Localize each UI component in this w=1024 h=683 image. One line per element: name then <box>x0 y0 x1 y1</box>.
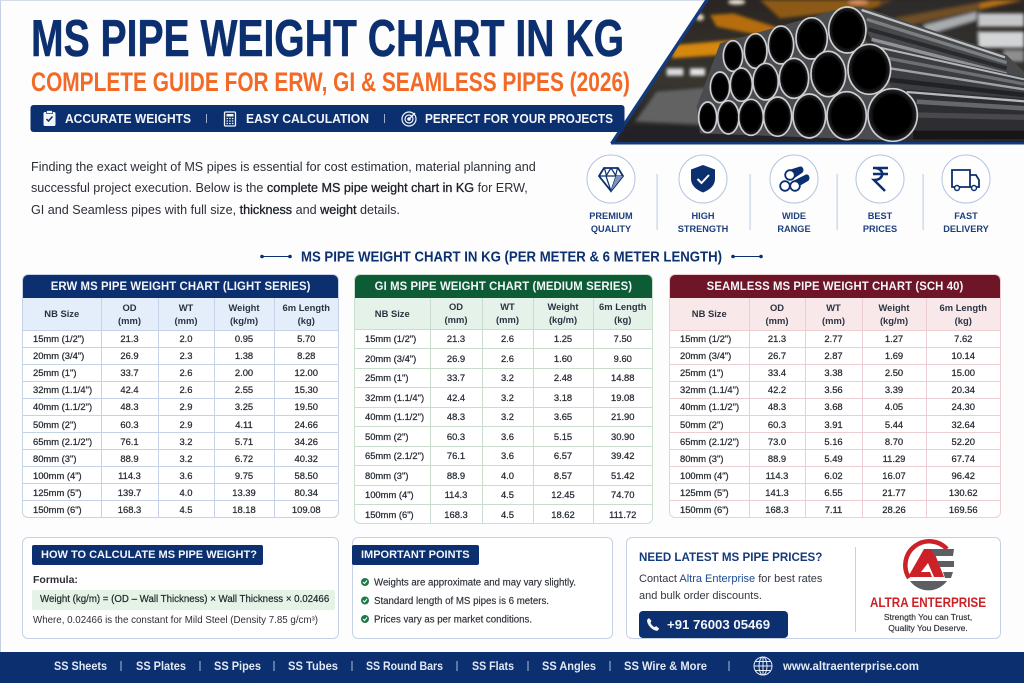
feature labels: WIDE <box>782 211 806 221</box>
table: ERW: Weight <box>228 302 260 313</box>
table: Seamless: 1.27 <box>885 333 903 344</box>
table: Seamless: 21.3 <box>768 333 786 344</box>
table: GI: 21.3 <box>447 333 465 344</box>
table: Seamless: 73.0 <box>768 436 786 447</box>
table: GI: 15mm (1/2") <box>365 333 416 344</box>
table: ERW: 58.50 <box>295 470 318 481</box>
table: Seamless: 1.69 <box>885 350 903 361</box>
table: GI: 12.45 <box>551 489 575 500</box>
table: ERW: 13.39 <box>232 487 256 498</box>
table: GI: 25mm (1") <box>365 372 408 383</box>
table: GI: 114.3 <box>445 489 467 500</box>
panel: ERW table <box>22 274 339 518</box>
table: GI: 51.42 <box>611 470 634 481</box>
table: ERW: WT <box>179 302 193 313</box>
icon: pipes <box>770 155 818 203</box>
table: ERW: OD <box>122 302 137 313</box>
table: Seamless <box>670 298 1000 517</box>
table: Seamless: 32.64 <box>952 419 975 430</box>
heading: ERW: ERW MS PIPE WEIGHT CHART (LIGHT SERIES) <box>51 279 310 293</box>
table: ERW: 25mm (1") <box>33 367 76 378</box>
table: ERW: 2.3 <box>179 350 193 361</box>
table: Seamless: 3.68 <box>824 401 843 412</box>
table: ERW: 4.5 <box>179 504 193 515</box>
table: ERW: 42.4 <box>120 384 139 395</box>
heading: GI <box>355 275 652 298</box>
table: ERW: 15mm (1/2") <box>33 333 84 344</box>
table: GI: 40mm (1.1/2") <box>365 411 424 422</box>
table: Seamless: 169.56 <box>949 504 978 515</box>
table: ERW: 5.71 <box>235 436 253 447</box>
table: Seamless: (kg) <box>955 315 972 326</box>
table: GI: 5.15 <box>554 431 572 442</box>
formula label: Formula: <box>33 574 78 586</box>
table: Seamless: 33.4 <box>768 367 786 378</box>
footer bar: SS Tubes <box>288 661 338 673</box>
panel: contact and logo <box>626 537 1001 639</box>
table: GI: 4.5 <box>501 509 514 520</box>
table: ERW: 50mm (2") <box>33 419 76 430</box>
table: GI: Weight <box>547 301 579 312</box>
heading: how to calculate: HOW TO CALCULATE MS PIPE WEIGHT? <box>41 549 257 561</box>
table: Seamless: 88.9 <box>768 453 786 464</box>
brand tagline: Strength You can Trust, <box>884 612 972 622</box>
heading: Seamless <box>670 275 1000 298</box>
table: ERW: 15.30 <box>295 384 318 395</box>
table: GI: (mm) <box>445 314 467 325</box>
table: ERW: 125mm (5") <box>33 487 82 498</box>
table: ERW: (kg) <box>298 315 315 326</box>
table: Seamless: 15.00 <box>952 367 975 378</box>
table: GI: 48.3 <box>447 411 465 422</box>
table: GI: 6.57 <box>554 450 572 461</box>
table: GI: 42.4 <box>447 392 465 403</box>
feature labels: PRICES <box>863 224 897 234</box>
brand logo <box>903 539 954 590</box>
feature labels: HIGH <box>692 211 715 221</box>
table: GI: 65mm (2.1/2") <box>365 450 424 461</box>
table: Seamless: 8.70 <box>885 436 903 447</box>
icon: diamond <box>587 155 635 203</box>
table: ERW: 3.6 <box>179 470 193 481</box>
pipe bodies <box>853 7 1024 142</box>
tagline bar <box>30 105 624 132</box>
panel: GI table <box>354 274 653 524</box>
heading: ERW <box>23 275 338 298</box>
table: GI: 150mm (6") <box>365 509 414 520</box>
footer bar: SS Angles <box>542 661 596 673</box>
table: GI: WT <box>500 301 515 312</box>
table: GI: 14.88 <box>611 372 634 383</box>
table: Seamless: 7.11 <box>825 504 842 515</box>
table: ERW: 40.32 <box>295 453 318 464</box>
tagline bar: PERFECT FOR YOUR PROJECTS <box>425 111 613 126</box>
table: Seamless: 42.2 <box>768 384 786 395</box>
table: ERW: 8.28 <box>297 350 315 361</box>
table: ERW: 88.9 <box>120 453 139 464</box>
table: GI: 60.3 <box>447 431 465 442</box>
table: ERW: 2.55 <box>235 384 253 395</box>
table: ERW: 114.3 <box>118 470 141 481</box>
table: GI: 3.65 <box>554 411 572 422</box>
heading: Seamless: SEAMLESS MS PIPE WEIGHT CHART (SCH 40) <box>707 279 963 293</box>
pipe stack backing <box>696 10 891 140</box>
table: Seamless: 80mm (3") <box>680 453 723 464</box>
icon: globe <box>754 657 772 675</box>
table: Seamless: 2.50 <box>885 367 903 378</box>
feature labels: RANGE <box>777 224 811 234</box>
table: GI: 50mm (2") <box>365 431 408 442</box>
brand tagline <box>884 612 972 633</box>
footer bar: SS Flats <box>472 661 514 673</box>
table: GI: 7.50 <box>614 333 632 344</box>
footer bar <box>0 652 1024 683</box>
bullet list <box>361 578 576 626</box>
table: Seamless: Weight <box>878 302 910 313</box>
formula box: Weight (kg/m) = (OD – Wall Thickness) × Wall Thickness × 0.02466 <box>40 594 329 605</box>
table: GI: 2.6 <box>501 353 514 364</box>
table: ERW: 6.72 <box>235 453 253 464</box>
table: ERW: 80mm (3") <box>33 453 76 464</box>
contact text <box>639 573 822 602</box>
table: Seamless: 25mm (1") <box>680 367 723 378</box>
table: Seamless: 67.74 <box>952 453 975 464</box>
table: GI: (mm) <box>496 314 519 325</box>
table: ERW: 2.00 <box>235 367 253 378</box>
table: GI: 3.6 <box>501 431 514 442</box>
table: GI: 30.90 <box>611 431 634 442</box>
table: Seamless: 130.62 <box>949 487 978 498</box>
table: Seamless: 48.3 <box>768 401 786 412</box>
heading: how to calculate <box>32 545 263 565</box>
footer bar: SS Wire & More <box>624 661 707 673</box>
intro paragraph: GI and Seamless pipes with full size, thickness and weight details. <box>31 203 400 217</box>
table: Seamless: 5.44 <box>885 419 903 430</box>
table: Seamless: OD <box>770 302 784 313</box>
table: ERW <box>23 298 338 517</box>
table: GI: 76.1 <box>447 450 465 461</box>
divider <box>855 547 856 632</box>
table: ERW: 33.7 <box>120 367 139 378</box>
table: ERW: 21.3 <box>120 333 139 344</box>
contact text: Contact Altra Enterprise for best rates <box>639 573 822 585</box>
table: ERW: NB Size <box>44 308 79 319</box>
table: Seamless: 6.55 <box>824 487 843 498</box>
table: GI: 3.2 <box>501 392 514 403</box>
table: GI: 3.2 <box>501 372 514 383</box>
table: ERW: 19.50 <box>295 401 318 412</box>
table: Seamless: 150mm (6") <box>680 504 729 515</box>
table: Seamless: 21.77 <box>882 487 906 498</box>
table: GI: 3.6 <box>501 450 514 461</box>
table: Seamless: 32mm (1.1/4") <box>680 384 739 395</box>
table: ERW: 150mm (6") <box>33 504 82 515</box>
footer bar: SS Pipes <box>214 661 261 673</box>
table: Seamless: WT <box>826 302 841 313</box>
table: GI: 100mm (4") <box>365 489 414 500</box>
table: Seamless: 15mm (1/2") <box>680 333 731 344</box>
table: Seamless: 2.87 <box>824 350 843 361</box>
table: Seamless: 60.3 <box>768 419 786 430</box>
table: Seamless: (mm) <box>822 315 845 326</box>
table: ERW: 18.18 <box>232 504 256 515</box>
table: Seamless: 141.3 <box>765 487 789 498</box>
bullet list: Weights are approximate and may vary slightly. <box>374 578 576 588</box>
table: ERW: (mm) <box>118 315 141 326</box>
table: Seamless: 3.56 <box>824 384 843 395</box>
table: Seamless: 3.38 <box>824 367 843 378</box>
table: ERW: 9.75 <box>235 470 253 481</box>
table: GI: 3.2 <box>501 411 514 422</box>
table: ERW: 65mm (2.1/2") <box>33 436 92 447</box>
contact text: and bulk order discounts. <box>639 590 762 602</box>
table: GI: 1.25 <box>554 333 572 344</box>
table: Seamless: 96.42 <box>952 470 975 481</box>
icon: truck <box>942 155 990 203</box>
heading: GI: GI MS PIPE WEIGHT CHART (MEDIUM SERIES) <box>375 279 632 293</box>
footer bar: SS Plates <box>136 661 186 673</box>
table: Seamless: 5.49 <box>824 453 843 464</box>
table: ERW: 5.70 <box>297 333 315 344</box>
table: ERW: 40mm (1.1/2") <box>33 401 92 412</box>
contact heading: NEED LATEST MS PIPE PRICES? <box>639 551 822 564</box>
table: GI: 4.0 <box>501 470 514 481</box>
bullet list: Standard length of MS pipes is 6 meters. <box>374 596 549 607</box>
table: ERW: 3.2 <box>179 453 193 464</box>
feature labels: PREMIUM <box>589 211 633 221</box>
table: ERW: 168.3 <box>118 504 141 515</box>
table: ERW: 34.26 <box>295 436 318 447</box>
feature labels <box>589 211 989 234</box>
table: GI: 18.62 <box>551 509 575 520</box>
table: ERW: 12.00 <box>295 367 318 378</box>
table: Seamless: 26.7 <box>768 350 786 361</box>
table: ERW: 76.1 <box>120 436 139 447</box>
table: GI: 2.48 <box>554 372 572 383</box>
table: GI: 8.57 <box>554 470 572 481</box>
table: GI: NB Size <box>375 308 410 319</box>
footer bar: SS Sheets <box>54 661 107 673</box>
table: ERW: 2.9 <box>179 401 193 412</box>
feature labels: FAST <box>954 211 978 221</box>
table: ERW: 24.66 <box>295 419 318 430</box>
icon: rupee <box>856 155 904 203</box>
intro paragraph: successful project execution. Below is the complete MS pipe weight chart in KG for ERW, <box>31 181 528 195</box>
table: Seamless: 6.02 <box>824 470 843 481</box>
table: GI: 33.7 <box>447 372 465 383</box>
table: Seamless: 100mm (4") <box>680 470 729 481</box>
phone button: +91 76003 05469 <box>667 617 770 632</box>
table: ERW: 4.0 <box>179 487 193 498</box>
table: GI: 168.3 <box>444 509 468 520</box>
table: Seamless: 28.26 <box>882 504 906 515</box>
table: ERW: 6m Length <box>283 302 330 313</box>
title <box>31 10 630 97</box>
table: ERW: 2.0 <box>179 333 193 344</box>
table: Seamless: 40mm (1.1/2") <box>680 401 739 412</box>
brand tagline: Quality You Deserve. <box>888 623 968 633</box>
icon: shield check <box>679 155 727 203</box>
table: Seamless: 7.62 <box>954 333 972 344</box>
table: Seamless: 10.14 <box>952 350 975 361</box>
icon: phone <box>647 618 660 631</box>
heading: important points <box>352 545 479 565</box>
table: Seamless: 3.39 <box>885 384 903 395</box>
table: ERW: 1.38 <box>235 350 253 361</box>
phone button <box>639 611 788 638</box>
table: Seamless: 114.3 <box>766 470 788 481</box>
table: GI: 1.60 <box>554 353 572 364</box>
table: Seamless: 52.20 <box>952 436 975 447</box>
table: GI: (kg) <box>614 314 631 325</box>
table: GI: 80mm (3") <box>365 470 408 481</box>
table: ERW: 2.9 <box>179 419 193 430</box>
table: GI <box>355 298 652 523</box>
heading: important points: IMPORTANT POINTS <box>361 549 470 561</box>
tagline bar: ACCURATE WEIGHTS <box>65 111 191 126</box>
table: ERW: 4.11 <box>235 419 253 430</box>
table: ERW: 100mm (4") <box>33 470 82 481</box>
table: ERW: 32mm (1.1/4") <box>33 384 92 395</box>
intro paragraph: Finding the exact weight of MS pipes is essential for cost estimation, material planning and <box>31 160 536 174</box>
table: Seamless: 20.34 <box>952 384 975 395</box>
table: Seamless: 11.29 <box>883 453 905 464</box>
table: Seamless: 20mm (3/4") <box>680 350 731 361</box>
feature labels: DELIVERY <box>943 224 989 234</box>
table: ERW: (kg/m) <box>230 315 258 326</box>
table: GI: 39.42 <box>611 450 634 461</box>
table: ERW: (mm) <box>175 315 197 326</box>
table: ERW: 20mm (3/4") <box>33 350 84 361</box>
table: GI: 21.90 <box>611 411 634 422</box>
table: GI: (kg/m) <box>549 314 577 325</box>
table: Seamless: (mm) <box>766 315 788 326</box>
feature labels: STRENGTH <box>678 224 729 234</box>
table: ERW: 80.34 <box>295 487 318 498</box>
formula note: Where, 0.02466 is the constant for Mild Steel (Density 7.85 g/cm³) <box>33 615 318 626</box>
icon: target <box>402 112 416 126</box>
feature labels: QUALITY <box>591 224 631 234</box>
icon: calculator <box>224 112 236 126</box>
icon: clipboard check <box>44 110 56 126</box>
table: GI: 3.18 <box>554 392 572 403</box>
pipe openings <box>699 7 917 141</box>
table: GI: 88.9 <box>447 470 465 481</box>
table: Seamless: 6m Length <box>940 302 987 313</box>
header photo: stacked steel pipes <box>610 0 1024 144</box>
table: Seamless: 5.16 <box>824 436 843 447</box>
table: Seamless: 65mm (2.1/2") <box>680 436 739 447</box>
table: GI: 6m Length <box>599 301 646 312</box>
table: GI: 20mm (3/4") <box>365 353 416 364</box>
table: Seamless: 4.05 <box>885 401 903 412</box>
feature labels: BEST <box>868 211 893 221</box>
table: Seamless: NB Size <box>692 308 727 319</box>
panel: Seamless table <box>669 274 1001 518</box>
table: GI: 32mm (1.1/4") <box>365 392 424 403</box>
table: Seamless: 2.77 <box>824 333 843 344</box>
table: ERW: 2.6 <box>179 367 193 378</box>
table: Seamless: 50mm (2") <box>680 419 723 430</box>
table: GI: 4.5 <box>501 489 514 500</box>
table: GI: 9.60 <box>614 353 632 364</box>
table: GI: OD <box>449 301 463 312</box>
table: ERW: 48.3 <box>120 401 139 412</box>
formula box <box>32 590 335 610</box>
feature icons row <box>586 154 990 234</box>
panel: important points <box>352 537 613 639</box>
table: ERW: 3.25 <box>235 401 253 412</box>
table: Seamless: 168.3 <box>765 504 789 515</box>
table: GI: 26.9 <box>447 353 465 364</box>
tagline bar: EASY CALCULATION <box>246 111 369 126</box>
table: ERW: 109.08 <box>292 504 321 515</box>
table: ERW: 139.7 <box>118 487 141 498</box>
table: Seamless: 16.07 <box>882 470 906 481</box>
footer bar: SS Round Bars <box>366 661 443 673</box>
table: ERW: 3.2 <box>179 436 193 447</box>
table: GI: 19.08 <box>611 392 634 403</box>
bullet list: Prices vary as per market conditions. <box>374 614 532 626</box>
table: GI: 111.72 <box>609 509 636 520</box>
table: Seamless: 3.91 <box>824 419 843 430</box>
table: ERW: 60.3 <box>120 419 139 430</box>
table: Seamless: 24.30 <box>952 401 975 412</box>
section heading: MS PIPE WEIGHT CHART IN KG (PER METER & 6 METER LENGTH) <box>301 248 722 266</box>
table: Seamless: (kg/m) <box>880 315 908 326</box>
table: GI: 2.6 <box>501 333 514 344</box>
table: ERW: 26.9 <box>120 350 139 361</box>
table: Seamless: 125mm (5") <box>680 487 729 498</box>
panel: how to calculate <box>22 537 339 639</box>
footer bar: www.altraenterprise.com <box>782 661 919 673</box>
table: GI: 74.70 <box>611 489 634 500</box>
table: ERW: 0.95 <box>235 333 253 344</box>
intro paragraph <box>31 160 536 217</box>
table: ERW: 2.6 <box>179 384 193 395</box>
